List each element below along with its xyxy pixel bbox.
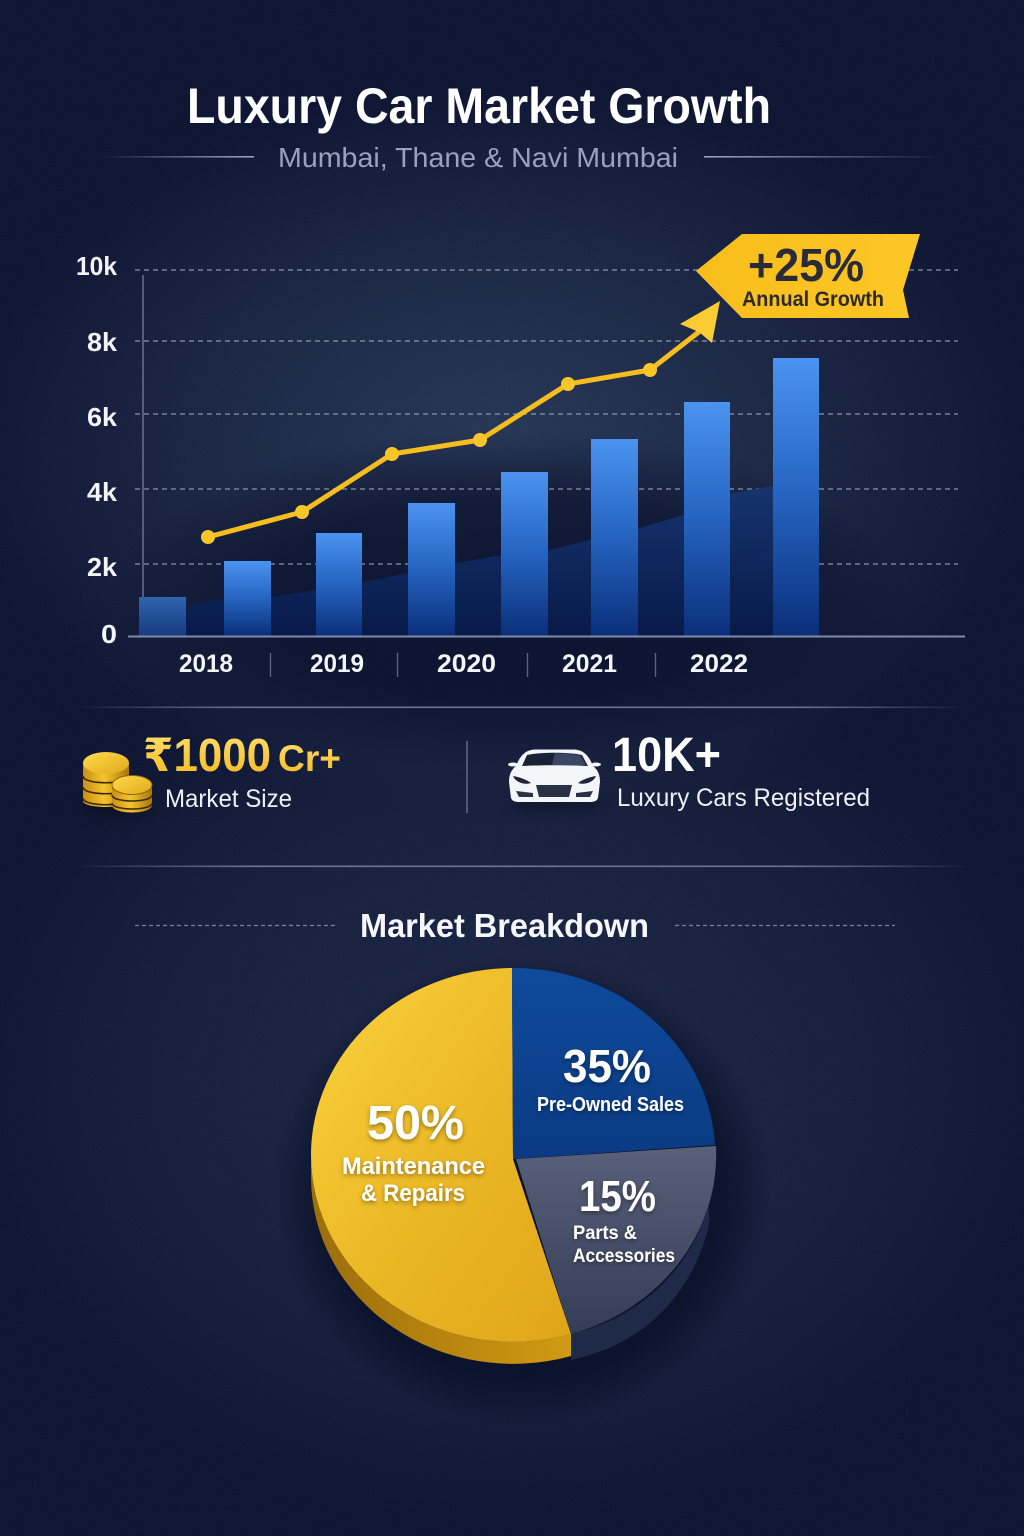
heading: market breakdown: Market Breakdown — [360, 907, 649, 944]
pie labels: 15% — [579, 1172, 656, 1221]
stat: cars registered — [507, 729, 870, 812]
slice: maintenance and repairs — [311, 968, 571, 1342]
x-axis labels: 2021 — [562, 650, 617, 678]
callout: annual growth: Annual Growth — [742, 288, 884, 311]
pie labels: Parts & — [573, 1222, 637, 1244]
pie shadow — [272, 955, 772, 1425]
pie chart — [272, 955, 772, 1425]
title: Luxury Car Market Growth — [187, 78, 771, 134]
icon: car — [507, 750, 603, 808]
bars — [139, 358, 819, 636]
pie labels: 50% — [367, 1097, 464, 1150]
pie labels: Accessories — [573, 1245, 675, 1267]
chart shadow — [110, 430, 910, 770]
growth line with arrow — [201, 301, 720, 544]
pie labels — [342, 1040, 684, 1267]
stat: market size: Cr+ — [278, 738, 341, 779]
y-axis labels: 8k — [87, 327, 118, 357]
stat: market size: Market Size — [165, 785, 292, 813]
pie labels: 35% — [563, 1040, 651, 1092]
callout: annual growth — [696, 234, 920, 318]
x-axis labels: 2020 — [437, 650, 496, 678]
pie side wall — [311, 1155, 709, 1364]
x-axis labels: 2018 — [179, 650, 233, 678]
x-axis labels — [179, 650, 748, 678]
y-axis labels: 2k — [87, 552, 118, 582]
slice: pre-owned sales — [512, 968, 715, 1159]
pie labels: Pre-Owned Sales — [537, 1094, 684, 1116]
y-axis labels: 6k — [87, 402, 118, 432]
bar and line chart — [76, 251, 965, 770]
pie labels: Maintenance — [342, 1153, 485, 1180]
x-axis labels: 2022 — [690, 650, 748, 678]
stat: cars registered: Luxury Cars Registered — [617, 784, 870, 812]
area behind bars — [186, 486, 819, 636]
y-axis labels: 4k — [87, 477, 118, 507]
stat: market size — [82, 729, 341, 814]
subtitle with flanking rules: Mumbai, Thane & Navi Mumbai — [278, 142, 678, 173]
icon: coins — [82, 752, 154, 814]
stat: cars registered: 10K+ — [612, 729, 721, 782]
y-axis labels: 10k — [76, 251, 118, 281]
x-axis labels: 2019 — [310, 650, 364, 678]
y-axis labels: 0 — [101, 619, 117, 649]
baseline — [128, 636, 965, 638]
pie labels: & Repairs — [361, 1180, 465, 1207]
slice: parts and accessories — [516, 1146, 716, 1334]
stat: market size: ₹1000 — [143, 729, 271, 781]
callout: annual growth: +25% — [748, 239, 864, 291]
y-axis labels — [76, 251, 118, 649]
